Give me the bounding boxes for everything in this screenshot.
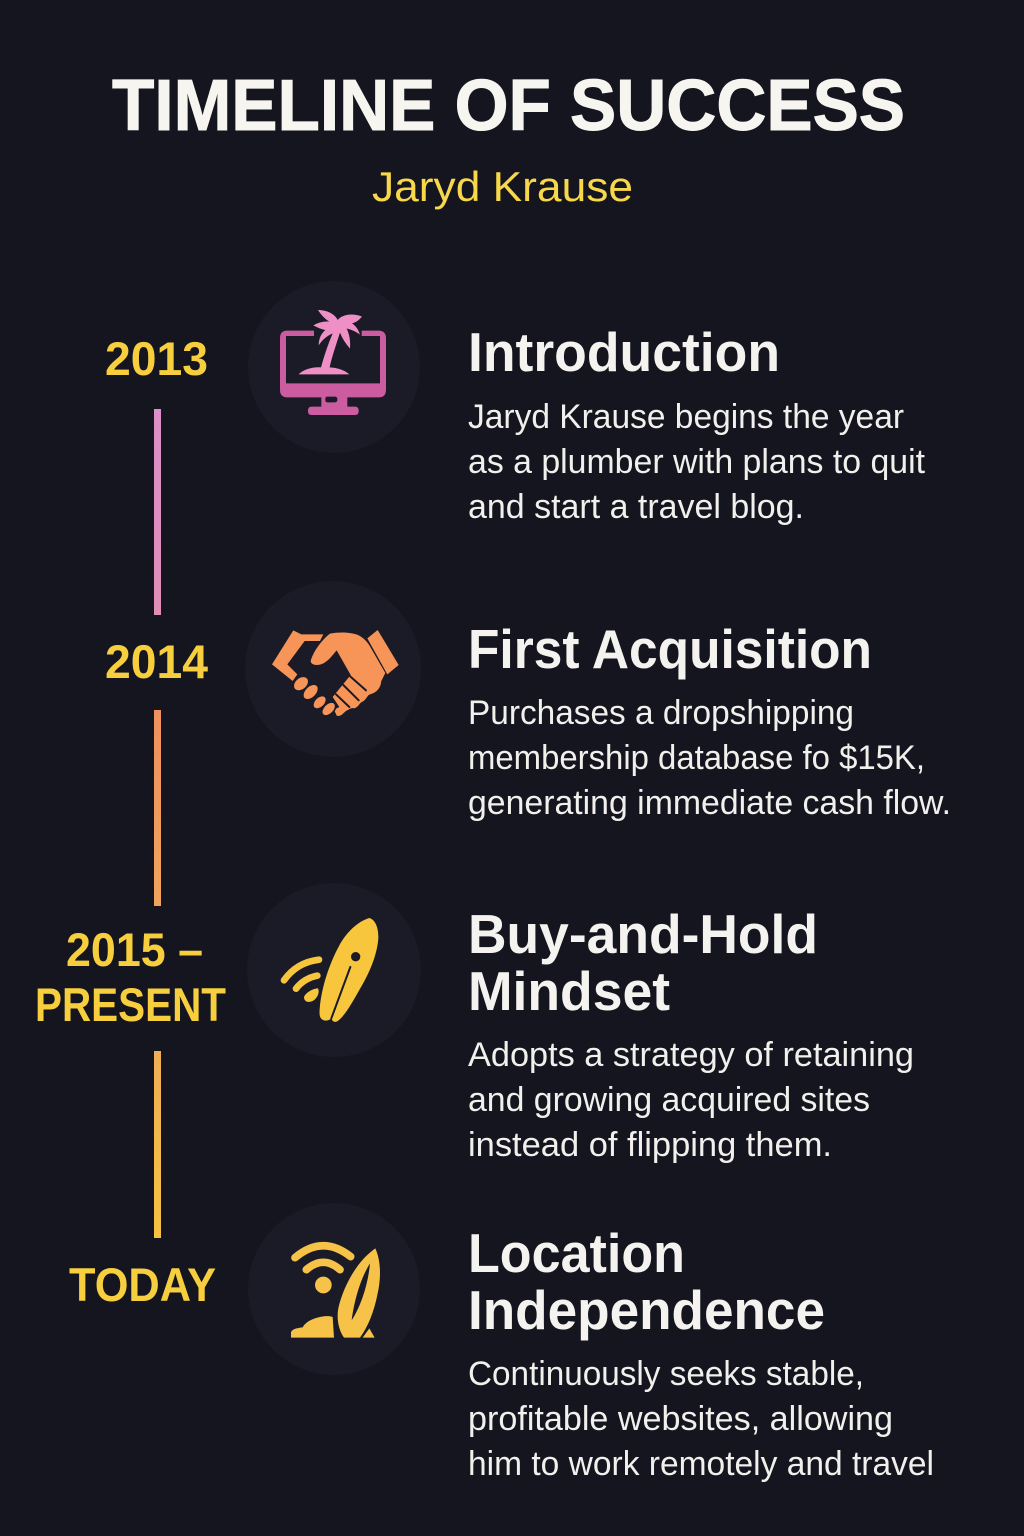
panel: introduction xyxy=(468,321,926,526)
text: introduction body: and start a travel blog. xyxy=(468,488,804,526)
connector line: 2013 to 2014 xyxy=(154,409,161,615)
text: first acquisition body: membership database fo $15K, xyxy=(468,739,925,777)
heading: location independence: Location xyxy=(468,1222,685,1284)
text: location independence body: him to work remotely and travel xyxy=(468,1445,934,1483)
text: first acquisition body: Purchases a dropshipping xyxy=(468,694,854,732)
text: introduction body: as a plumber with plans to quit xyxy=(468,443,926,481)
connector line: present to today xyxy=(154,1051,161,1238)
icon: handshake xyxy=(245,581,421,757)
icon: surfboard with wifi waves xyxy=(247,883,421,1057)
icon: monitor with palm tree xyxy=(248,281,420,453)
connector line: 2014 to 2015 xyxy=(154,710,161,906)
year: 2013: 2013 xyxy=(105,332,208,385)
text: location independence body: Continuously seeks stable, xyxy=(468,1355,864,1393)
subtitle: Jaryd Krause xyxy=(372,163,633,210)
heading: buy-and-hold mindset xyxy=(468,903,818,1022)
year: 2015 to present: 2015 – xyxy=(66,923,203,976)
text: location independence body xyxy=(468,1355,934,1483)
title: TIMELINE OF SUCCESS xyxy=(112,66,905,146)
heading: first acquisition: First Acquisition xyxy=(468,618,872,680)
year: 2014: 2014 xyxy=(105,635,208,688)
text: buy-and-hold body xyxy=(468,1036,914,1164)
text: buy-and-hold body: and growing acquired sites xyxy=(468,1081,870,1119)
text: buy-and-hold body: instead of flipping them. xyxy=(468,1126,832,1164)
heading: buy-and-hold mindset: Mindset xyxy=(468,960,670,1022)
text: introduction body: Jaryd Krause begins the year xyxy=(468,398,904,436)
panel: first acquisition xyxy=(468,618,951,822)
text: first acquisition body: generating immediate cash flow. xyxy=(468,784,951,822)
year: today: TODAY xyxy=(69,1258,216,1311)
icon: wifi, surfboard and beach xyxy=(248,1203,420,1375)
heading: buy-and-hold mindset: Buy-and-Hold xyxy=(468,903,818,965)
year: 2015 to present xyxy=(35,923,226,1031)
text: location independence body: profitable websites, allowing xyxy=(468,1400,893,1438)
heading: location independence xyxy=(468,1222,825,1341)
heading: introduction: Introduction xyxy=(468,321,780,383)
year: 2015 to present: PRESENT xyxy=(35,978,226,1031)
panel: buy-and-hold mindset xyxy=(468,903,914,1164)
text: first acquisition body xyxy=(468,694,951,822)
text: introduction body xyxy=(468,398,926,526)
text: buy-and-hold body: Adopts a strategy of retaining xyxy=(468,1036,914,1074)
heading: location independence: Independence xyxy=(468,1279,825,1341)
panel: location independence xyxy=(468,1222,934,1483)
